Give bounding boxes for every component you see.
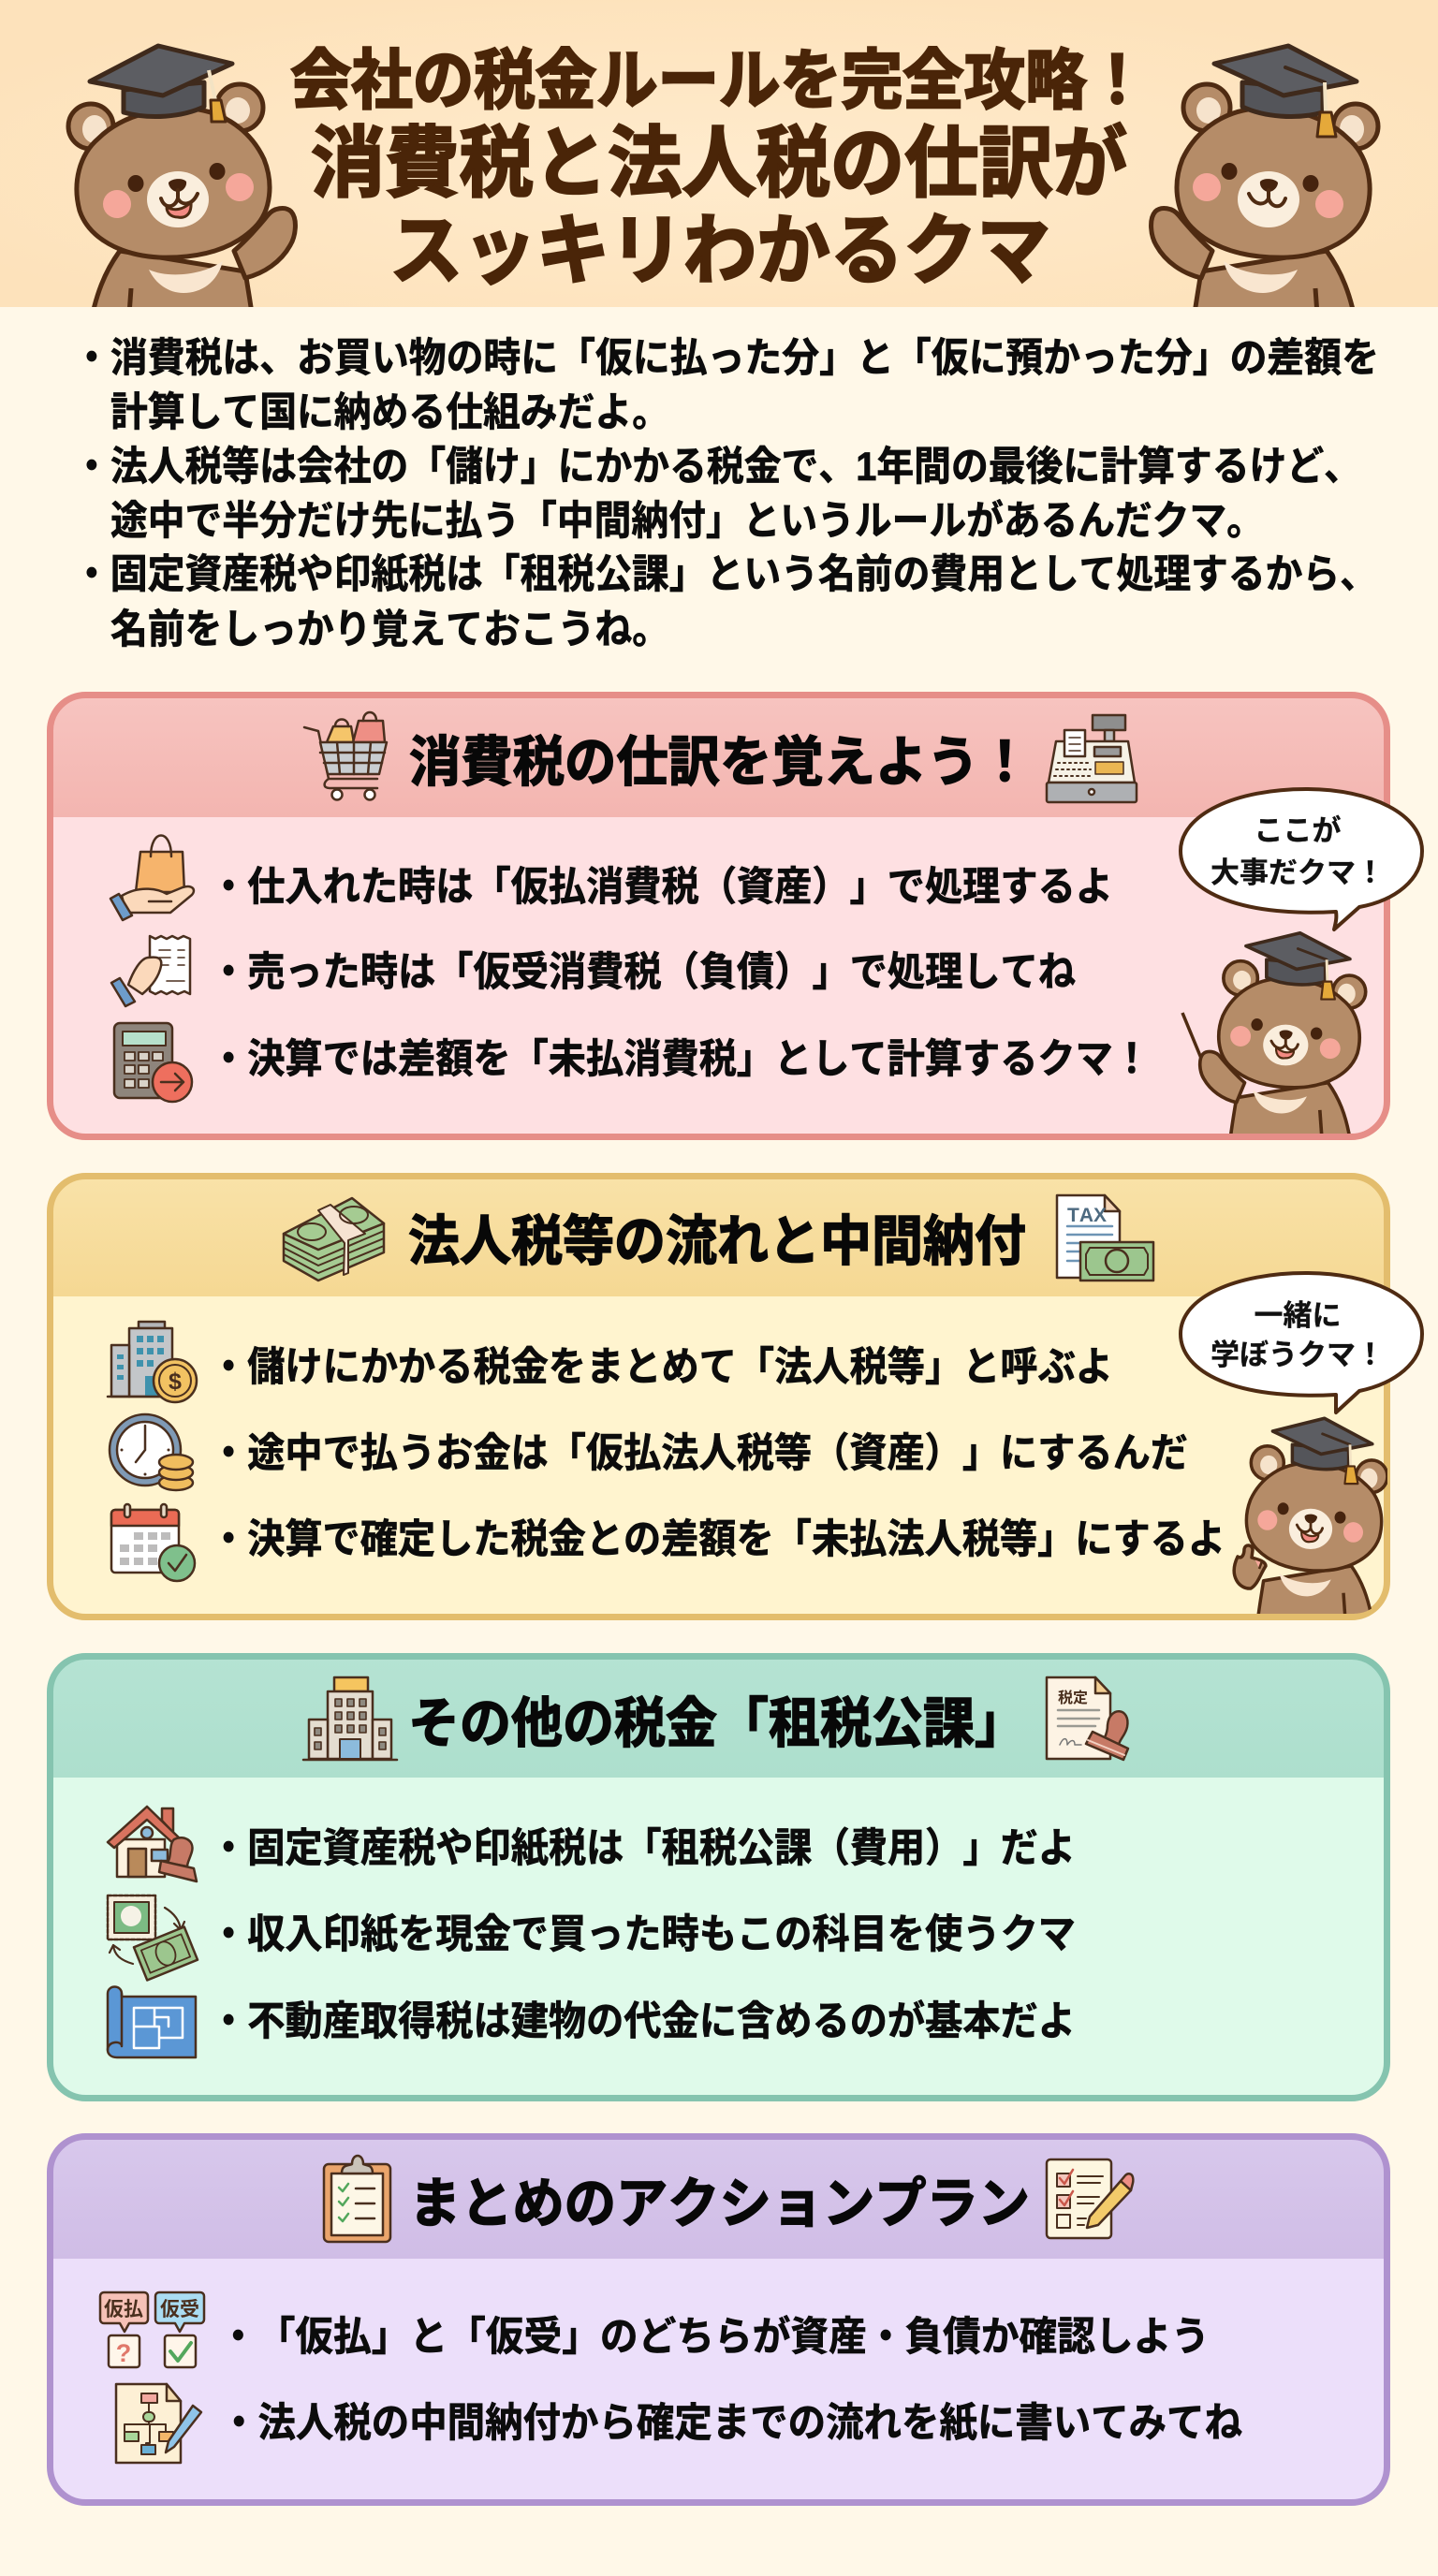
icon: office building with coin bbox=[108, 1322, 197, 1402]
icon: document with stamp bbox=[1047, 1677, 1128, 1760]
row: settlement bbox=[114, 1023, 1151, 1102]
icon: hand holding receipt bbox=[111, 936, 190, 1006]
icon: calendar with check bbox=[111, 1504, 195, 1581]
title: 会社の税金ルールを完全攻略！ bbox=[290, 44, 1148, 117]
icon: flowchart and pencil bbox=[116, 2384, 201, 2463]
panel: corporate tax flow and interim payment bbox=[51, 1176, 1422, 1621]
icon: 仮払 仮受 bubbles: 仮受 bbox=[160, 2299, 199, 2320]
row: fixed asset tax: ・固定資産税や印紙税は「租税公課（費用）」だよ bbox=[210, 1826, 1076, 1871]
icon: clipboard checklist bbox=[324, 2156, 390, 2242]
icon: 仮払 仮受 bubbles bbox=[100, 2292, 204, 2367]
row: sale bbox=[111, 936, 1076, 1006]
icon: calculator with arrow bbox=[114, 1023, 192, 1102]
intro bullet text block: 計算して国に納める仕組みだよ。 bbox=[110, 390, 669, 435]
row: interim payment bbox=[110, 1414, 1188, 1490]
panel: summary action plan bbox=[51, 2136, 1387, 2503]
panel: consumption tax journal entries bbox=[51, 695, 1422, 1138]
icon: house and stamp bbox=[108, 1807, 197, 1881]
icon: tax document with bill: TAX bbox=[1067, 1205, 1107, 1226]
speech bubble: ここが大事だクマ bbox=[1181, 789, 1422, 929]
heading: other taxes: その他の税金「租税公課」 bbox=[408, 1693, 1026, 1754]
header band bbox=[0, 0, 1438, 328]
row: sale: ・売った時は「仮受消費税（負債）」で処理してね bbox=[210, 950, 1076, 995]
bear: right header bear waving bbox=[1152, 46, 1378, 328]
icon: shopping cart bbox=[304, 712, 387, 799]
icon: tax document with bill bbox=[1057, 1195, 1153, 1281]
speech bubble: ここが大事だクマ: ここが bbox=[1255, 814, 1341, 847]
row: profits tax: ・儲けにかかる税金をまとめて「法人税等」と呼ぶよ bbox=[210, 1345, 1113, 1390]
row: revenue stamp: ・収入印紙を現金で買った時もこの科目を使うクマ bbox=[210, 1912, 1076, 1957]
row: acquisition tax: ・不動産取得税は建物の代金に含めるのが基本だよ bbox=[210, 1999, 1076, 2044]
row: acquisition tax bbox=[108, 1986, 1076, 2057]
row: check temporary payments and receipts bbox=[100, 2292, 1210, 2367]
row: profits tax bbox=[108, 1322, 1113, 1402]
row: final settlement: ・決算で確定した税金との差額を「未払法人税等」にするよ bbox=[210, 1517, 1225, 1562]
bear: left header bear waving bbox=[68, 46, 295, 328]
row: check temporary payments and receipts: ・「仮払」と「仮受」のどちらが資産・負債か確認しよう bbox=[219, 2315, 1210, 2360]
speech bubble: 一緒に学ぼうクマ: 学ぼうクマ！ bbox=[1211, 1339, 1385, 1371]
icon: checklist and pencil bbox=[1047, 2159, 1133, 2238]
heading: action plan: まとめのアクションプラン bbox=[409, 2174, 1030, 2234]
row: fixed asset tax bbox=[108, 1807, 1076, 1881]
row: final settlement bbox=[111, 1504, 1225, 1581]
row: revenue stamp bbox=[108, 1895, 1076, 1980]
row: write flow on paper bbox=[116, 2384, 1242, 2463]
icon: clock with coins bbox=[110, 1414, 193, 1490]
speech bubble: 一緒に学ぼうクマ bbox=[1181, 1273, 1422, 1412]
title: 消費税と法人税の仕訳が bbox=[311, 120, 1127, 207]
icon: hand holding bag bbox=[110, 835, 194, 920]
icon: cash register bbox=[1047, 715, 1137, 802]
row: interim payment: ・途中で払うお金は「仮払法人税等（資産）」にするんだ bbox=[210, 1431, 1188, 1476]
intro bullet text block: 名前をしっかり覚えておこうね。 bbox=[110, 607, 669, 652]
row: purchase: ・仕入れた時は「仮払消費税（資産）」で処理するよ bbox=[210, 865, 1113, 910]
icon: stack of money bbox=[284, 1198, 384, 1281]
icon: office building with coin: $ bbox=[169, 1368, 182, 1395]
icon: stamp and money exchange bbox=[108, 1895, 198, 1980]
icon: government building bbox=[303, 1677, 397, 1760]
heading: consumption tax: 消費税の仕訳を覚えよう！ bbox=[409, 732, 1031, 793]
intro bullet text block: ・法人税等は会社の「儲け」にかかる税金で、1年間の最後に計算するけど、 bbox=[73, 445, 1361, 490]
panel: other taxes 租税公課 bbox=[51, 1657, 1387, 2099]
icon: document with stamp: 税定 bbox=[1058, 1690, 1088, 1706]
bear: pointing with stick bbox=[1182, 933, 1366, 1138]
title: スッキリわかるクマ bbox=[389, 209, 1050, 294]
title bbox=[290, 44, 1148, 294]
row: write flow on paper: ・法人税の中間納付から確定までの流れを紙に書いてみてね bbox=[220, 2401, 1242, 2446]
heading: corporate tax: 法人税等の流れと中間納付 bbox=[408, 1211, 1026, 1272]
intro bullet text block: 途中で半分だけ先に払う「中間納付」というルールがあるんだクマ。 bbox=[110, 499, 1264, 544]
icon: blueprint bbox=[108, 1986, 196, 2057]
speech bubble: ここが大事だクマ: 大事だクマ！ bbox=[1211, 856, 1385, 889]
row: purchase bbox=[110, 835, 1113, 920]
icon: 仮払 仮受 bubbles: 仮払 bbox=[104, 2299, 143, 2320]
bear: thumbs up bbox=[1234, 1418, 1387, 1621]
row: settlement: ・決算では差額を「未払消費税」として計算するクマ！ bbox=[210, 1037, 1151, 1082]
icon: 仮払 仮受 bubbles: ? bbox=[116, 2339, 131, 2367]
intro bullet text block bbox=[73, 336, 1379, 652]
speech bubble: 一緒に学ぼうクマ: 一緒に bbox=[1255, 1299, 1341, 1332]
